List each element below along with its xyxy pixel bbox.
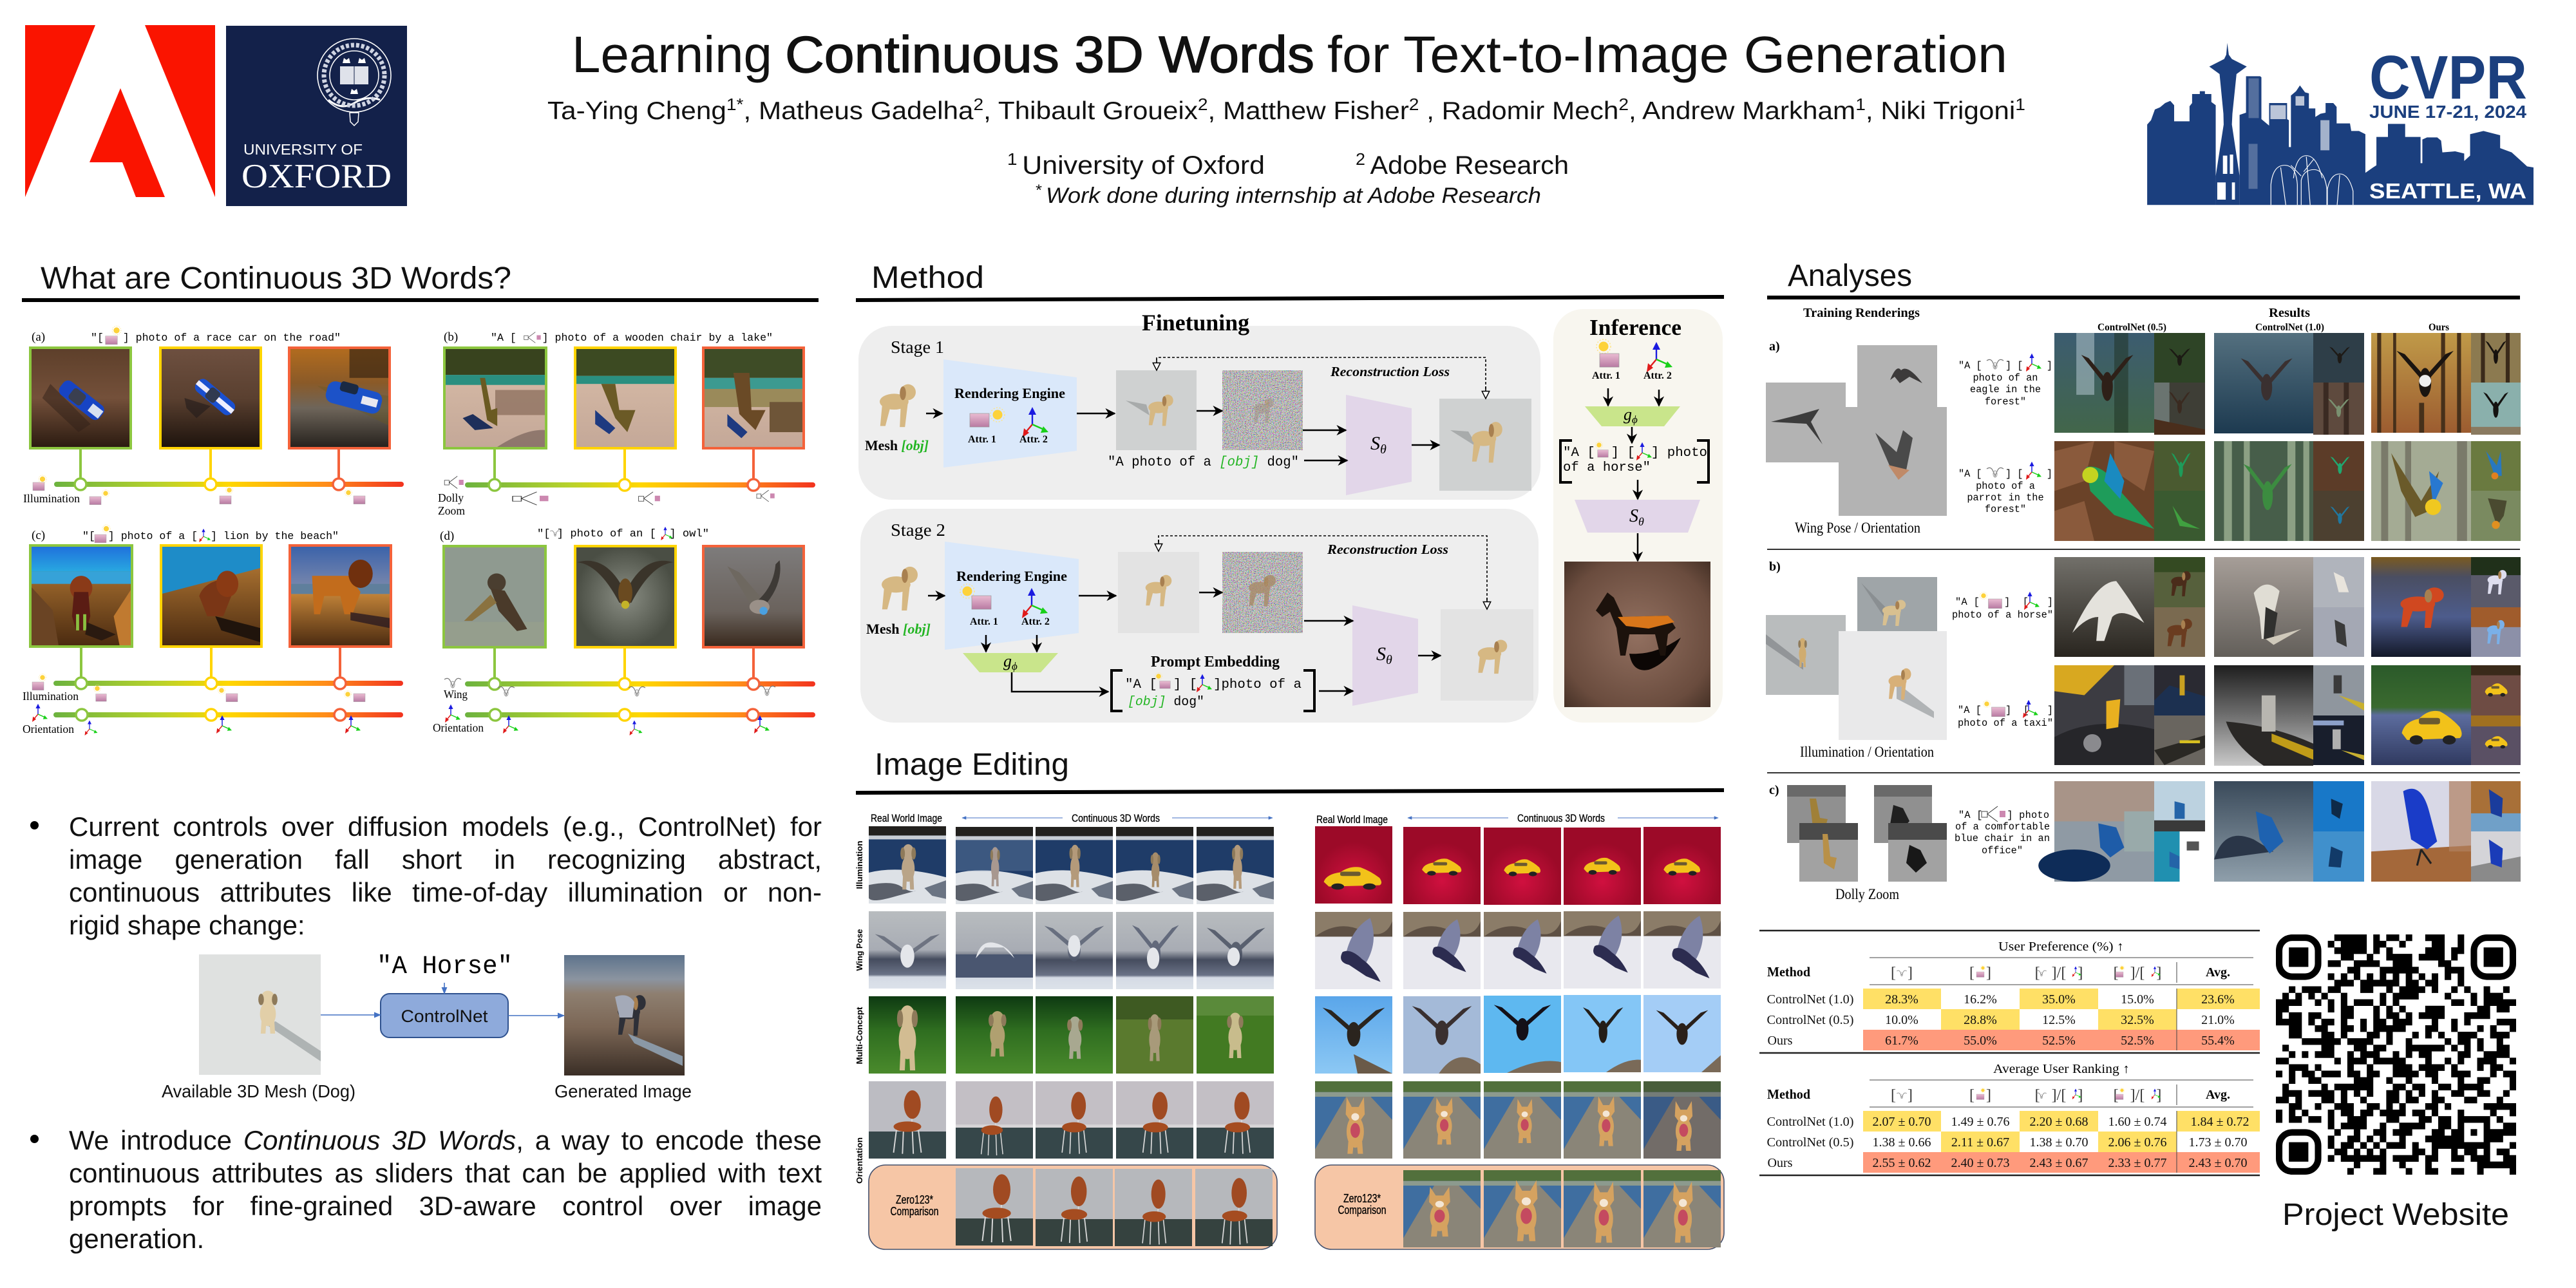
grid: taxi illumination <box>1315 826 1721 905</box>
image: generated horse <box>564 955 685 1075</box>
table values: 55.0% <box>1964 1034 1997 1048</box>
callout: Zero123 comparison, corgi: Zero123* <box>1343 1192 1381 1205</box>
affiliations: 2 <box>1356 149 1370 169</box>
group c: dolly zoom <box>1769 781 2521 902</box>
table values: 1.49 ± 0.76 <box>1951 1115 2009 1129</box>
table: User Preference: Method <box>1767 964 1810 980</box>
authors: , Niki Trigoni <box>1866 97 2015 125</box>
example a: illumination of a race car <box>23 326 404 505</box>
table values: 52.5% <box>2042 1034 2076 1048</box>
sliders: wing pose and orientation: Wing <box>444 688 468 701</box>
panel: Stage 1: Mesh [obj] <box>865 437 929 453</box>
authors: 2 <box>1618 95 1629 114</box>
title <box>572 26 2007 83</box>
prompt: eagle <box>1958 354 2052 408</box>
column headers: Continuous 3D Words <box>1072 812 1160 824</box>
table values: 2.40 ± 0.73 <box>1951 1156 2009 1170</box>
column icons: [ ] <box>1891 1087 1913 1104</box>
table values: 52.5% <box>2121 1034 2154 1048</box>
text block: Continuous 3D Words introduction: prompts for fine-grained 3D-aware control over image <box>69 1191 822 1221</box>
prompt: eagle: forest" <box>1985 396 2026 408</box>
table values: ControlNet (1.0) <box>1767 992 1853 1007</box>
table values: 2.11 ± 0.67 <box>1951 1135 2009 1150</box>
slider: dolly zoom: Dolly <box>438 491 464 504</box>
table values <box>1767 1115 2249 1170</box>
bullet marker 1 <box>30 821 39 829</box>
text block: current controls limitation: rigid shape change: <box>69 910 305 940</box>
text block: current controls limitation: image generation fall short in recognizing abstract, <box>69 844 822 875</box>
slider: illumination <box>23 475 404 505</box>
slider: dolly zoom: Zoom <box>438 504 465 517</box>
panel: Stage 1: Attr. 2 <box>1019 434 1048 445</box>
authors: 2 <box>1198 95 1208 114</box>
table values: Ours <box>1768 1156 1793 1170</box>
grid: pigeon wing pose <box>1315 911 1721 989</box>
text: Project Website: Project Website <box>2282 1198 2509 1232</box>
column icons: [ ]/[ ] <box>2114 965 2161 981</box>
example d: wing pose and orientation of an owl: (d) <box>440 529 454 543</box>
column icons: [ ]/[ ] <box>2035 1087 2083 1104</box>
affiliations: University of Oxford <box>1022 151 1265 180</box>
authors: , Andrew Markham <box>1629 97 1855 125</box>
column icons: [ ] <box>1891 965 1913 981</box>
text: A Horse prompt: "A Horse" <box>377 952 513 981</box>
table values: Ours <box>1768 1034 1793 1048</box>
table values: 16.2% <box>1964 992 1997 1007</box>
authors: 2 <box>974 95 983 114</box>
callout: Zero123 comparison, chair: Comparison <box>890 1205 939 1218</box>
text block: current controls limitation <box>69 811 822 940</box>
table values: 35.0% <box>2042 992 2076 1007</box>
panel: Stage 2: Prompt Embedding <box>1151 654 1280 670</box>
prompt: parrot <box>1958 462 2052 515</box>
affiliations <box>1007 149 1569 180</box>
example a: illumination of a race car: (a) <box>32 330 45 344</box>
panel: Inference: "A [ ] [ ] photo <box>1563 446 1707 460</box>
prompt: taxi <box>1958 700 2053 729</box>
column headers: ControlNet (1.0) <box>2255 322 2324 333</box>
prompt: taxi: "A [ ] [ ] <box>1958 705 2053 716</box>
logo: CVPR 2024 Seattle: CVPR <box>2369 43 2527 112</box>
panel: Stage 2: S <box>1376 643 1386 665</box>
diagram: ControlNet limitation <box>162 952 692 1101</box>
footnote: internship: Work done during internship at Adobe Research <box>1046 184 1541 208</box>
table values: 61.7% <box>1885 1034 1918 1048</box>
title: Continuous 3D Words <box>785 26 1314 83</box>
authors: 1 <box>1855 95 1866 114</box>
prompt: office chair: of a comfortable <box>1955 821 2050 833</box>
example c: illumination and orientation of a lion <box>23 525 403 735</box>
prompt: parrot: "A [ ] [ ] <box>1958 468 2052 480</box>
example b: dolly zoom of a chair <box>438 330 815 517</box>
prompt: office chair: office" <box>1982 845 2023 857</box>
authors: 1 <box>2015 95 2025 114</box>
text block: Continuous 3D Words introduction <box>69 1125 822 1254</box>
grid: eagle multi-concept <box>1315 995 1721 1074</box>
header arrows <box>962 817 1718 819</box>
captions: Generated Image <box>554 1081 692 1101</box>
authors: , Radomir Mech <box>1419 97 1618 125</box>
panel: Stage 2: Mesh [obj] <box>866 621 931 637</box>
example c: illumination and orientation of a lion: (c) <box>32 529 45 542</box>
column headers: Real World Image <box>1316 813 1388 826</box>
affiliations: 1 <box>1007 149 1022 169</box>
grid: dog illumination <box>868 826 1274 904</box>
table values: 12.5% <box>2042 1013 2076 1027</box>
footnote: internship: * <box>1035 182 1046 199</box>
table values: 2.33 ± 0.77 <box>2108 1156 2166 1170</box>
heading: Finetuning: Finetuning <box>1142 310 1249 336</box>
example d: wing pose and orientation of an owl: "[ ] photo of an [ ] owl" <box>537 528 709 540</box>
table values: 55.4% <box>2201 1034 2235 1048</box>
column icons: [ ] <box>1969 965 1991 981</box>
panel: Image Editing <box>855 748 1724 1249</box>
text block: current controls limitation: Current controls over diffusion models (e.g., ControlNet) for <box>69 811 822 842</box>
table: Average User Ranking: Average User Ranking ↑ <box>1993 1062 2130 1076</box>
column icons: [ ]/[ ] <box>2035 965 2083 981</box>
column headers <box>1803 306 2449 333</box>
prompt: office chair: "A [ ] photo <box>1958 810 2049 821</box>
prompt: office chair: blue chair in an <box>1955 833 2050 844</box>
example b: dolly zoom of a chair: "A [ ] photo of a wooden chair by a lake" <box>491 332 773 345</box>
column headers: Results <box>2269 306 2310 320</box>
box: ControlNet: ControlNet <box>401 1007 488 1026</box>
panel: Inference: ϕ <box>1632 413 1638 426</box>
row labels: Illumination <box>855 840 864 889</box>
table values: 1.60 ± 0.74 <box>2108 1115 2166 1129</box>
table: Average User Ranking: Method <box>1767 1086 1810 1102</box>
affiliations: Adobe Research <box>1370 151 1569 180</box>
captions: Available 3D Mesh (Dog) <box>162 1081 355 1101</box>
title: for Text-to-Image Generation <box>1327 26 2007 83</box>
title: Learning <box>572 26 772 83</box>
prompt: parrot: forest" <box>1985 504 2026 515</box>
panel: Stage 2: Attr. 2 <box>1021 616 1050 627</box>
table values: 15.0% <box>2121 992 2154 1007</box>
column headers: Ours <box>2429 322 2449 333</box>
grid: chair orientation <box>869 1081 1274 1159</box>
panel: Stage 2: Reconstruction Loss <box>1327 542 1448 557</box>
group a: wing pose and orientation: Wing Pose / Orientation <box>1795 520 1920 536</box>
sliders: wing pose and orientation: Orientation <box>433 721 484 734</box>
panel: Stage 1: θ <box>1380 442 1387 457</box>
column headers: ControlNet (0.5) <box>2098 322 2166 333</box>
divider <box>1767 549 2520 550</box>
table: User Preference <box>1759 931 2260 1053</box>
panel: Stage 2: g <box>1003 652 1012 670</box>
group b: illumination and orientation: b) <box>1769 560 1781 574</box>
table values: ControlNet (0.5) <box>1767 1135 1853 1150</box>
authors: , Thibault Groueix <box>983 97 1198 125</box>
panel: Stage 2: Rendering Engine <box>956 568 1067 584</box>
table values: 1.38 ± 0.70 <box>2030 1135 2088 1150</box>
results: eagle <box>2054 333 2521 435</box>
row labels <box>855 840 864 1184</box>
group c: dolly zoom: c) <box>1769 783 1779 797</box>
panel: Stage 2: "A [ ] [ ]photo of a <box>1125 677 1302 692</box>
prompt: parrot: parrot in the <box>1967 492 2044 504</box>
authors: 1* <box>726 95 744 114</box>
sliders: wing pose and orientation <box>433 678 815 735</box>
table values: 1.73 ± 0.70 <box>2189 1135 2247 1150</box>
sliders: illumination and orientation <box>23 674 403 735</box>
panel: Stage 1: Rendering Engine <box>954 385 1065 401</box>
table: Average User Ranking: Avg. <box>2206 1088 2230 1102</box>
table values: 2.55 ± 0.62 <box>1873 1156 1931 1170</box>
table values: 10.0% <box>1885 1013 1918 1027</box>
panel: Stage 1: Reconstruction Loss <box>1330 364 1450 379</box>
table values <box>1767 992 2235 1048</box>
logo: University of Oxford: OXFORD <box>242 158 392 195</box>
callout: Zero123 comparison, corgi: Comparison <box>1338 1204 1386 1217</box>
panel: Inference: Inference <box>1589 315 1681 340</box>
sliders: illumination and orientation: Orientation <box>23 723 74 735</box>
panel: Inference <box>1553 309 1723 723</box>
box: ControlNet <box>381 994 508 1037</box>
logo: University of Oxford <box>226 26 407 206</box>
prompt: taxi: photo of a taxi" <box>1958 717 2053 729</box>
authors: , Matheus Gadelha <box>744 97 974 125</box>
results: taxi <box>2054 665 2521 766</box>
panel: Stage 2: ϕ <box>1012 660 1018 672</box>
table values: 2.43 ± 0.70 <box>2189 1156 2247 1170</box>
table values: 1.84 ± 0.72 <box>2191 1115 2249 1129</box>
callout: Zero123 comparison, chair: Zero123* <box>896 1193 933 1206</box>
panel: Stage 2: Stage 2 <box>891 520 945 540</box>
table values: 28.3% <box>1885 992 1918 1007</box>
panel: Stage 2: [obj] dog" <box>1128 695 1204 710</box>
authors: , Matthew Fisher <box>1208 97 1409 125</box>
prompt: eagle: eagle in the <box>1970 384 2041 395</box>
panel: Inference: Attr. 2 <box>1643 370 1672 381</box>
group a: wing pose and orientation: a) <box>1769 339 1780 354</box>
text block: Continuous 3D Words introduction: We introduce Continuous 3D Words, a way to encode these <box>69 1125 822 1155</box>
heading: Image Editing <box>875 748 1069 782</box>
panel: Stage 1: "A photo of a [obj] dog" <box>1108 455 1299 470</box>
group b: illumination and orientation: Illumination / Orientation <box>1800 744 1934 760</box>
divider <box>1767 772 2520 773</box>
table: Average User Ranking <box>1759 1062 2260 1175</box>
logo: University of Oxford: UNIVERSITY OF <box>243 141 363 158</box>
captions <box>162 1081 692 1101</box>
row labels: Orientation <box>855 1137 864 1184</box>
prompt: horse <box>1952 592 2053 621</box>
example c: illumination and orientation of a lion: "[ ] photo of a [ ] lion by the beach" <box>82 531 339 543</box>
panel: Inference: g <box>1624 405 1632 424</box>
results: horse <box>2054 557 2521 657</box>
panel: Stage 1: Stage 1 <box>891 337 944 357</box>
sliders: illumination and orientation: Illumination <box>23 690 79 703</box>
column headers: Training Renderings <box>1803 306 1920 320</box>
table values: 2.06 ± 0.76 <box>2108 1135 2166 1150</box>
authors: 2 <box>1409 95 1419 114</box>
column headers: Continuous 3D Words <box>1517 812 1605 824</box>
panel: Analyses <box>1766 259 2521 902</box>
image: inference result horse <box>1564 562 1710 707</box>
row labels: Multi-Concept <box>855 1007 864 1064</box>
slider: dolly zoom <box>438 476 815 517</box>
grid: snow bird wing pose <box>869 911 1274 989</box>
table values: 32.5% <box>2121 1013 2154 1027</box>
logo: Adobe <box>25 25 215 197</box>
prompt: eagle: "A [ ] [ ] <box>1958 360 2052 372</box>
prompt: office chair <box>1955 806 2050 857</box>
panel: What are Continuous 3D Words? <box>22 261 819 735</box>
authors: Ta-Ying Cheng <box>547 97 713 125</box>
prompt: horse: "A [ ] [ ] <box>1955 596 2053 608</box>
panel: Stage 1 <box>858 326 1540 500</box>
panel: Stage 2 <box>860 509 1539 723</box>
example d: wing pose and orientation of an owl <box>433 527 815 735</box>
table values: 2.43 ± 0.67 <box>2030 1156 2088 1170</box>
slider: illumination: Illumination <box>23 492 80 505</box>
panel: Stage 2: θ <box>1386 653 1392 667</box>
bullet marker 2 <box>30 1135 39 1143</box>
prompt: horse: photo of a horse" <box>1952 609 2053 621</box>
group b: illumination and orientation <box>1766 557 2521 766</box>
results: office chair <box>2038 781 2521 882</box>
table: User Preference: User Preference (%) ↑ <box>1998 940 2124 954</box>
QR code <box>2276 934 2516 1175</box>
panel: Inference: Attr. 1 <box>1592 370 1620 381</box>
heading: What are Continuous 3D Words? <box>41 261 511 296</box>
results: parrot <box>2054 441 2521 541</box>
grid: corgi orientation <box>1315 1081 1721 1159</box>
table values: 21.0% <box>2201 1013 2235 1027</box>
example b: dolly zoom of a chair: (b) <box>444 330 458 344</box>
logo: CVPR 2024 Seattle <box>2147 43 2533 205</box>
row labels: Wing Pose <box>855 929 864 971</box>
heading: Analyses <box>1788 259 1912 293</box>
text block: current controls limitation: continuous attributes like time-of-day illumination or non- <box>69 877 822 907</box>
prompt: eagle: photo of an <box>1973 372 2038 384</box>
table values: 2.20 ± 0.68 <box>2030 1115 2088 1129</box>
text block: Continuous 3D Words introduction: generation. <box>69 1224 204 1254</box>
panel: Stage 1: S <box>1370 433 1380 454</box>
panel: Method <box>856 261 1724 723</box>
example a: illumination of a race car: "[ ] photo of a race car on the road" <box>91 332 341 345</box>
column icons: [ ] <box>1969 1087 1991 1104</box>
panel: Stage 1: Attr. 1 <box>968 434 996 445</box>
table values: 28.8% <box>1964 1013 1997 1027</box>
callout: Zero123 comparison, corgi <box>1315 1165 1724 1249</box>
image: available 3D mesh dog <box>199 954 321 1075</box>
table: User Preference: Avg. <box>2206 965 2230 980</box>
arrows <box>321 983 564 1016</box>
table values: 1.38 ± 0.66 <box>1873 1135 1931 1150</box>
grid: dog multi-concept <box>869 996 1274 1074</box>
text block: Continuous 3D Words introduction: continuous attributes as sliders that can be applied with text <box>69 1158 822 1188</box>
panel: Stage 2: Attr. 1 <box>970 616 998 627</box>
logo: CVPR 2024 Seattle: JUNE 17-21, 2024 <box>2369 102 2526 122</box>
table values: ControlNet (0.5) <box>1767 1013 1853 1027</box>
callout: Zero123 comparison, chair <box>869 1165 1277 1249</box>
column icons <box>1891 965 2161 981</box>
column icons <box>1891 1087 2161 1104</box>
table values: 23.6% <box>2201 992 2235 1007</box>
panel: Inference: θ <box>1638 515 1644 528</box>
logo: CVPR 2024 Seattle: SEATTLE, WA <box>2369 179 2526 203</box>
column headers: Real World Image <box>871 812 942 824</box>
column icons: [ ]/[ ] <box>2114 1087 2161 1104</box>
group a: wing pose and orientation <box>1766 333 2521 541</box>
table values: ControlNet (1.0) <box>1767 1115 1853 1129</box>
panel: Inference: S <box>1629 506 1638 526</box>
heading: Method <box>871 261 984 295</box>
panel: Inference: of a horse" <box>1563 460 1651 475</box>
group c: dolly zoom: Dolly Zoom <box>1835 886 1899 902</box>
column headers <box>871 812 1605 826</box>
table values: 2.07 ± 0.70 <box>1873 1115 1931 1129</box>
prompt: parrot: photo of a <box>1976 480 2035 492</box>
